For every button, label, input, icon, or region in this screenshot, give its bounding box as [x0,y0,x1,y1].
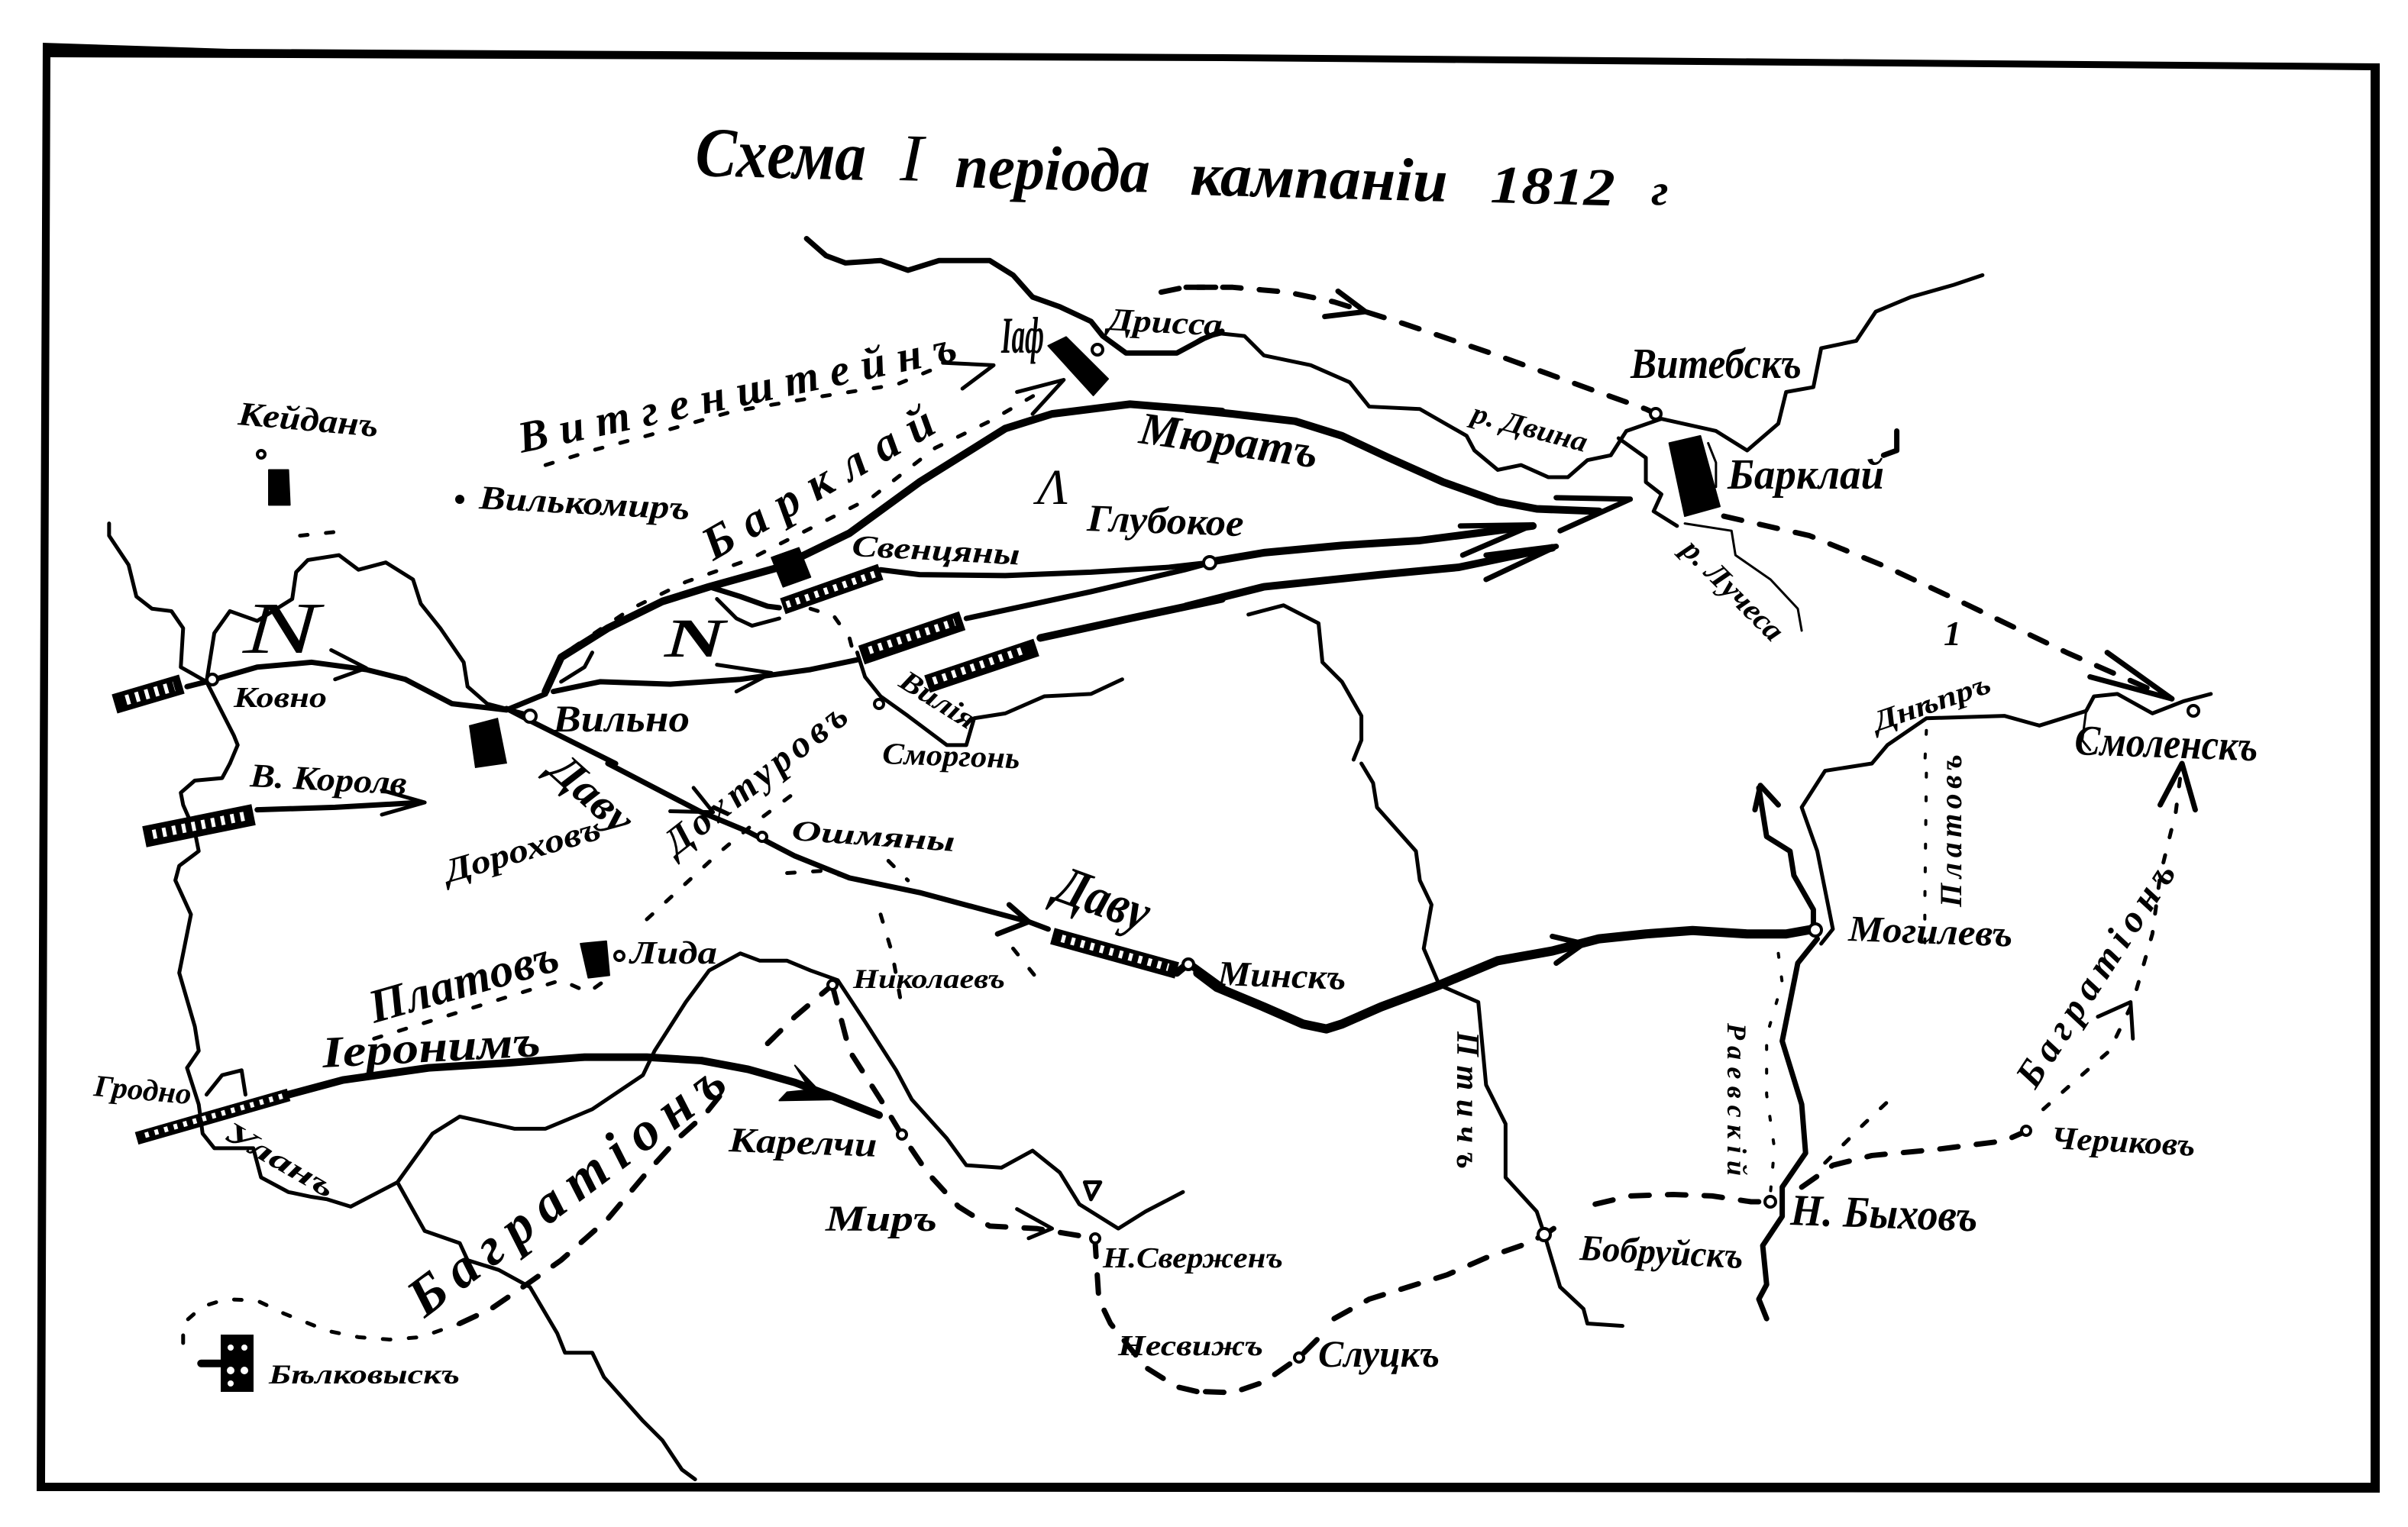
arrowhead: second column [1486,547,1556,579]
label: Vilna: Вильно [552,697,690,740]
arrowhead: mid Bagration route [2098,1002,2133,1038]
route: Minsk east start [1177,963,1222,987]
route: from Kovno to Vilna [187,662,545,710]
route: Vitebsk to Smolensk dashed [1724,516,2172,699]
route: Drissa to Vitebsk start [1161,287,1222,292]
title: г [1651,165,1669,215]
label: Bagration south: Багратіонъ [395,1050,737,1328]
label: Ulan: Уланъ [218,1115,341,1205]
unit: Lida [580,941,609,978]
river loop near Sventsiany [717,599,779,626]
river: Dnieper upper [1802,764,1872,944]
label: Volkovysk: Бѣлковыскъ [268,1359,460,1390]
river: Dvina, eastern part [1186,275,1983,477]
town markers [207,344,2199,1362]
dotted link to Nikolaev [881,915,900,997]
label: Ptich: Птичъ [1450,1031,1485,1169]
label: Raevsky: Раевскій [1721,1022,1752,1176]
river: Viliya to Vilna [206,555,530,715]
route: Murat, western part [545,404,1222,692]
label: Slutsk: Слуцкъ [1318,1332,1440,1375]
southeast quadrant of map [1198,764,2195,1393]
route: Chernikov to Smolensk [2043,764,2182,1109]
label: Iaf corps: Iаф [1000,306,1044,364]
label: Bagration east: Багратіонъ [2006,854,2183,1096]
unit: Vilna [469,718,507,768]
route: Jerome [289,1057,879,1115]
river: short Vitebsk branch [1708,443,1716,487]
arrowhead: Wittgenstein [943,363,994,389]
river: Berezina upper [1249,605,1362,760]
arrowhead: Drissa route [1325,291,1366,317]
arrowhead: Mogilev route [1553,936,1583,963]
route: first column to Glubokoe [966,563,1212,618]
arrowhead: Jerome [779,1065,879,1115]
dotted link to Minsk unit [1013,948,1036,978]
route: Sverzhen to Nesvizh [1095,1238,1208,1394]
arrowhead on Viliya column route [717,665,771,692]
river: south branch [397,1183,695,1480]
arrowhead: Mir route [1017,1209,1052,1238]
label: Lida: Лида [629,936,717,971]
label: Barclay route: Барклай [692,395,943,571]
arrowhead: Barclay [1017,379,1064,414]
label: Platov south: Платовъ [362,930,564,1034]
river: Dnieper at Smolensk [1872,694,2211,764]
route: Wittgenstein dotted [545,365,943,465]
label: Dokhturov: Дохтуровъ [652,693,855,865]
label: Mir: Миръ [825,1199,937,1239]
arrowhead: Murat [1556,498,1631,531]
label: Platov vertical: Платовъ [1934,754,1968,908]
label: Napoleon north: N [241,587,325,669]
label: Vitebsk: Витебскъ [1630,341,1802,388]
unit: Keydany [269,470,290,505]
route: Bagration dashed from Volkovysk [183,1299,460,1343]
route: Bobruisk to N. Bykhov [1595,1194,1770,1204]
arrowhead at Kovno route [331,650,367,680]
route: Dokhturov dotted [647,793,795,919]
route: branch to Sventsiany and Glubokoe [709,587,779,608]
label: Nikolaev: Николаевъ [852,964,1005,994]
route: second column east [1040,599,1222,638]
place and commander labels [92,302,2259,1390]
arrowhead: V. Korol [382,790,425,815]
arrow left of Volkovysk unit [201,1360,222,1367]
arrowhead: north from Mogilev [1755,786,1779,810]
river: Ptich [1362,764,1622,1326]
title: 1812 [1490,156,1616,218]
label: N. Bykhov: Н. Быховъ [1789,1185,1979,1241]
mark: lambda: Λ [1033,460,1068,515]
river: Viliya east branch [857,653,1122,745]
route: north from Mogilev [1759,788,1813,929]
label: Karelichi: Карелчи [728,1120,878,1164]
label: Cherikov: Чериковъ [2050,1121,2196,1164]
dotted links near Oshmyany [787,870,857,880]
arrowhead: Glubokoe route [1460,525,1533,555]
unit: Kovno hatched [115,684,182,704]
unit: Minsk hatched [1052,936,1177,970]
route: Sventsiany to Glubokoe [881,563,1212,576]
route: Raevsky dotted [1766,954,1783,1192]
northwest quadrant of map [109,239,1222,764]
route: Slutsk to Bobruisk [1334,1219,1568,1319]
title [694,113,1669,218]
dotted river link [810,609,853,653]
route: Bagration bold dashes [460,1090,725,1323]
dash-dot line [1825,1095,1896,1163]
route: Barclay dotted [573,389,1044,647]
route: Vilna to Viliya column [553,660,857,692]
route: V. Korol [257,802,421,810]
arrowhead: top of Bagration route [2160,764,2195,810]
unit: Volkovysk [221,1335,254,1392]
route: to Nikolaev dashed [768,985,832,1044]
label: Oshmyany: Ошмяны [790,815,956,858]
label: Kovno: Ковно [233,682,327,714]
label: V. Korol: В. Королв [248,757,408,802]
route: Platov dotted [374,973,616,1038]
label: Wittgenstein: Витгенштейнъ [512,321,961,463]
label: Davout second: Даву [1045,852,1159,944]
label: Keydany: Кейданъ [236,395,380,444]
route: Platov dotted [1925,773,1926,954]
dotted Platov top [1925,731,1926,764]
label: Glubokoe: Глубокое [1086,496,1244,544]
unit: Barclay at Vitebsk [1669,436,1720,516]
unit: Sventsiany hatched [783,572,881,606]
label: Sventsiany: Свенцяны [852,528,1021,572]
label: Minsk: Минскъ [1217,954,1346,997]
label: Dnieper: Днѣпръ [1867,668,1995,739]
mark at Grodno [206,1070,245,1095]
river: Dvina, western part [806,239,1222,353]
label: Viliya: Вилія [893,663,982,736]
northeast quadrant of map [1186,275,2211,764]
label: Vilkomir: Вилькомиръ [477,479,691,527]
mark beside Barclay label [1883,431,1897,455]
unit: V. Korol hatched [144,815,254,837]
dotted link [888,861,908,880]
dashes near Keydany [300,531,347,536]
arrowhead: Smolensk [2090,653,2172,699]
route: second column to Vitebsk [1186,548,1553,606]
title: кампаніи [1190,141,1449,215]
label: Davout first: Даву [537,741,645,844]
title: I [898,121,927,196]
label: N. Sverzhen: Н.Сверженъ [1102,1242,1283,1274]
route: Glubokoe to Vitebsk [1207,526,1533,563]
river: Smolensk loop [2082,711,2090,750]
label: Napoleon centre: N [663,608,729,669]
river: loop by Vitebsk [1618,438,1677,526]
label: Murat: Мюратъ [1136,402,1321,478]
route: Drissa to Vitebsk dashed [1186,287,1656,414]
label: Smorgon: Сморгонь [882,736,1020,775]
label: river Luchesa: р. Лучеса [1673,530,1792,648]
arrowhead: Davout second [997,905,1029,934]
route: Nikolaev to Sverzhen dashed [832,985,1095,1238]
unit: Sventsiany block [771,548,810,587]
unit: first column hatched [861,621,962,655]
mark at Sverzhen [1084,1183,1101,1199]
label: Nesvizh: Несвижъ [1117,1330,1263,1362]
unit: Grodno hatched [137,1095,289,1138]
label: Bobruisk: Бобруйскъ [1578,1228,1744,1277]
river: Dnieper lower [1759,939,1818,1319]
label: Dorokhov: Дороховъ [437,810,605,891]
label: Grodno: Гродно [92,1068,193,1111]
route: Davout to Minsk [608,764,1048,929]
river: Luchesa [1685,524,1802,631]
route: Nesvizh to Slutsk [1206,1338,1318,1393]
river: Neman through Grodno to Nikolaev and Sverzhen [176,764,1183,1228]
route: Murat, eastern part [1186,409,1599,512]
arrowhead: Davout first [671,788,713,812]
route: Minsk to Mogilev [1198,929,1813,1029]
unit: Drissa camp [1048,337,1108,395]
label: Mogilev: Могилевъ [1847,909,2013,954]
label: river Dvina: р. Двина [1466,396,1591,459]
title: періода [955,131,1151,206]
route: Bykhov to Chernikov [1802,1132,2026,1187]
unit: second column hatched [927,647,1036,684]
double line by Vilna [561,653,593,682]
label: Barclay: Барклай [1727,451,1884,499]
label: Drissa: Дрисса [1104,302,1223,344]
mark: one: 1 [1944,614,1961,653]
label: Smolensk: Смоленскъ [2074,717,2259,770]
southwest quadrant of map [176,764,1222,1480]
river: upper Neman [109,524,238,764]
label: Jerome: Іеронимъ [320,1016,541,1077]
route: Vilna to Oshmyany [506,709,616,764]
title: Схема [694,113,867,195]
